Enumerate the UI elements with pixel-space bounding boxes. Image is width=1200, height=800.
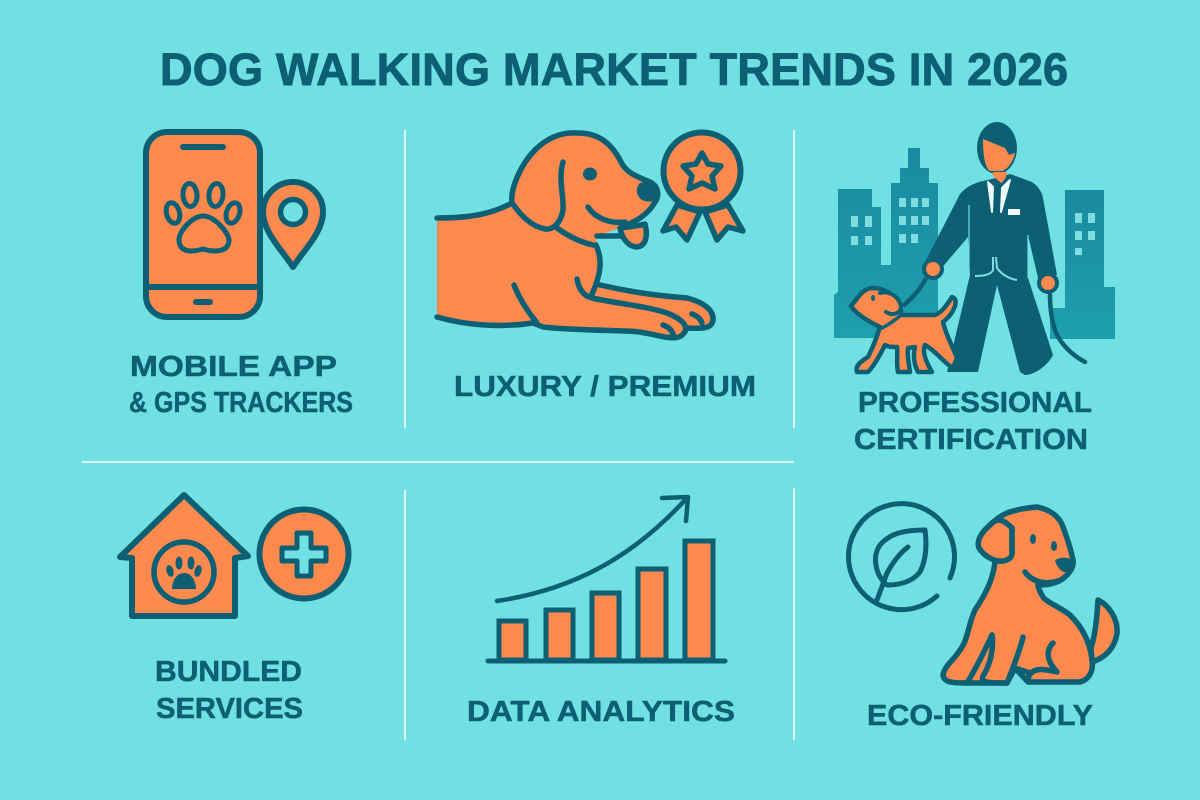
label: certification: CERTIFICATION xyxy=(854,424,1088,456)
label: GPS trackers: & GPS TRACKERS xyxy=(129,387,353,419)
label: data analytics: DATA ANALYTICS xyxy=(467,696,735,728)
label: professional: PROFESSIONAL xyxy=(858,387,1092,419)
label: services: SERVICES xyxy=(156,693,303,725)
icon: paw in house xyxy=(165,556,203,589)
bar chart xyxy=(488,541,725,661)
icon: award ribbon xyxy=(663,132,743,240)
icon: sitting puppy xyxy=(943,507,1117,683)
icon: medical cross xyxy=(260,510,348,598)
panel: luxury / premium xyxy=(437,132,756,403)
label: bundled: BUNDLED xyxy=(155,656,302,688)
panel: data analytics xyxy=(467,497,735,728)
panel: eco-friendly xyxy=(848,504,1117,732)
icon: dog house xyxy=(120,495,248,616)
icon: walker in suit xyxy=(903,122,1085,375)
panel: mobile app and GPS trackers xyxy=(129,132,353,419)
label: mobile app: MOBILE APP xyxy=(130,351,337,383)
panel: bundled services xyxy=(120,495,348,725)
icon: city skyline xyxy=(834,148,1115,339)
icon: leaf circle xyxy=(848,504,954,610)
icon: phone with paw xyxy=(146,132,260,317)
label: luxury / premium: LUXURY / PREMIUM xyxy=(454,371,756,403)
icon: lying dog xyxy=(437,133,713,338)
arrow: growth xyxy=(497,497,688,601)
icon: small dog xyxy=(851,288,957,372)
label: eco-friendly: ECO-FRIENDLY xyxy=(867,700,1093,732)
title: DOG WALKING MARKET TRENDS IN 2026 xyxy=(160,44,1068,95)
icon: map pin xyxy=(263,182,323,267)
panel: professional certification xyxy=(834,122,1115,456)
